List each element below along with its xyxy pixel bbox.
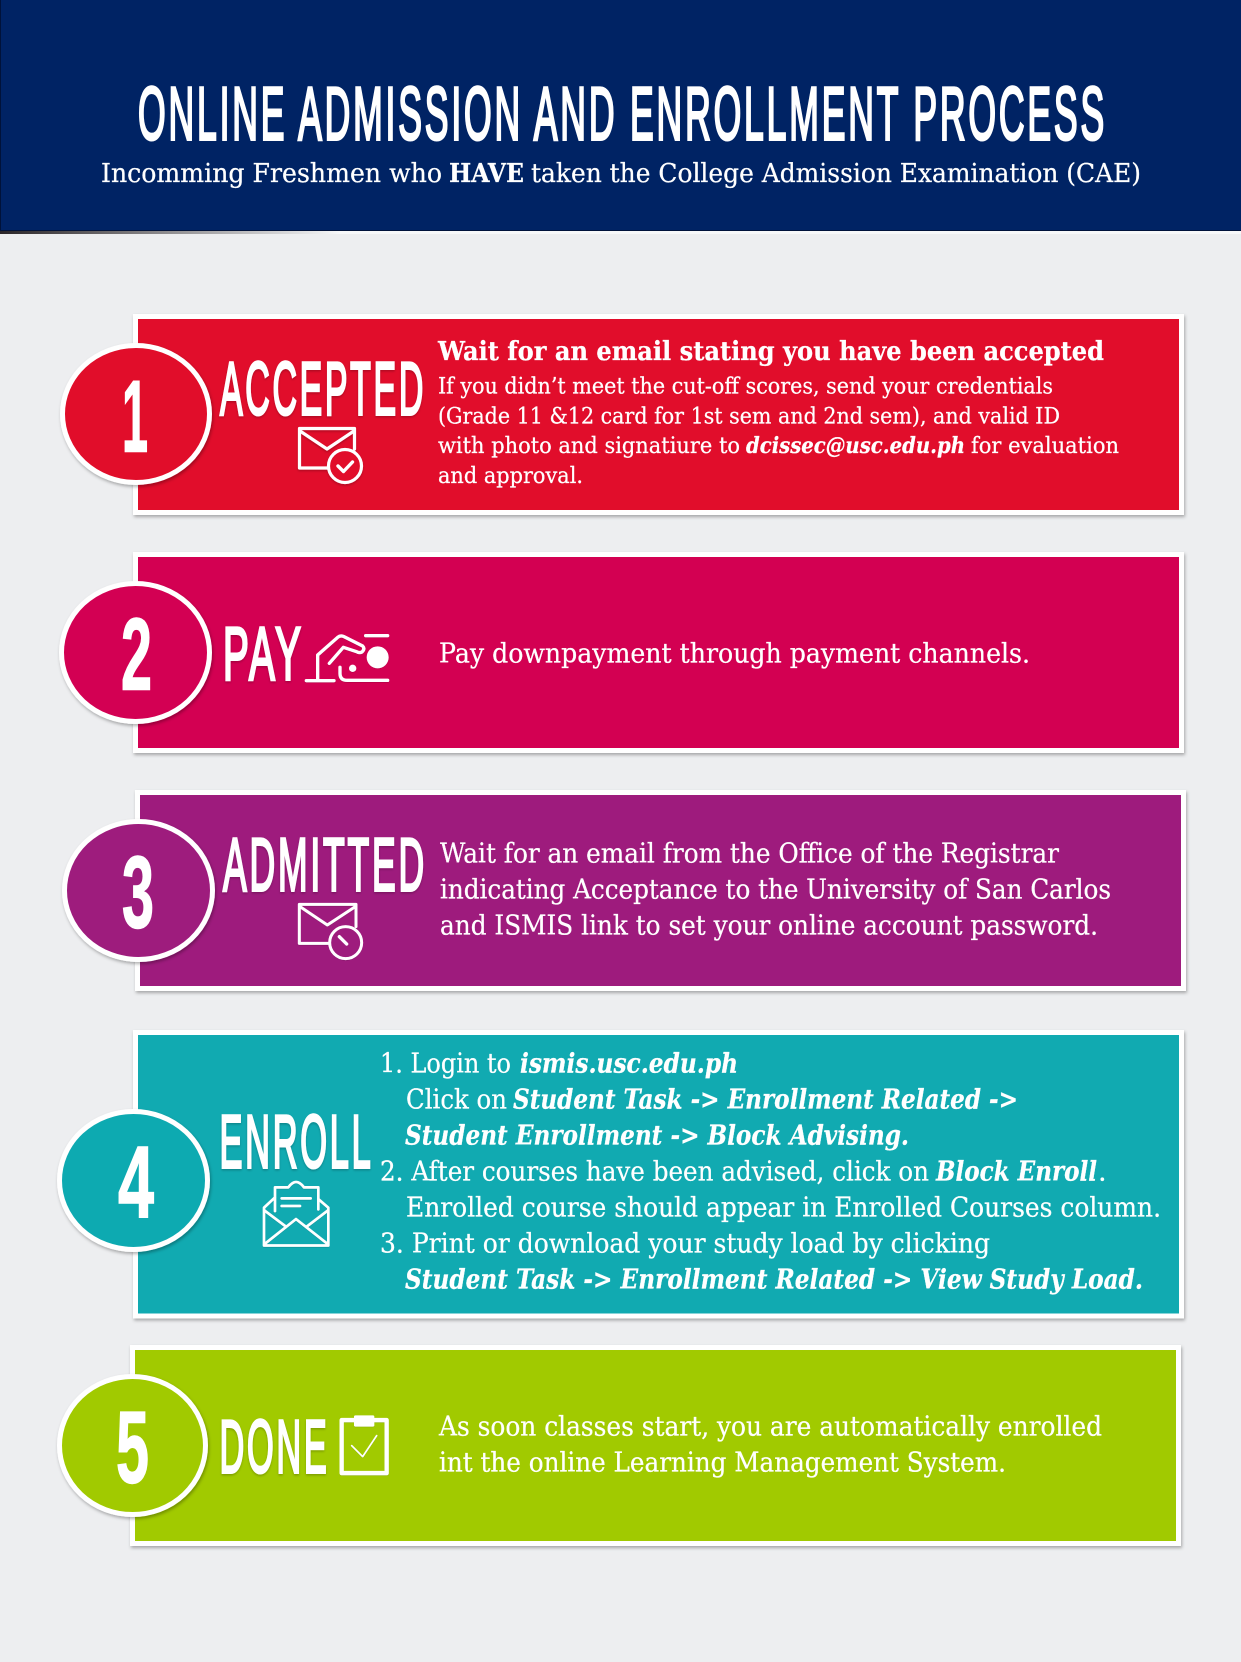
icon: clipboard with check	[342, 1415, 387, 1473]
step 3 number circle: 3	[122, 836, 154, 950]
step 2 number circle	[62, 584, 210, 722]
step 4 instructions	[380, 1048, 1161, 1296]
step 4 instructions: ismis.usc.edu.ph	[520, 1048, 738, 1080]
subtitle: Incomming Freshmen who	[101, 159, 442, 189]
step 3 text: indicating Acceptance to the University of San Carlos	[440, 874, 1111, 906]
step 4 instructions: Click on	[406, 1084, 507, 1116]
step 4 instructions: 2. After courses have been advised, click on	[380, 1156, 929, 1188]
step 5 number circle: 5	[116, 1390, 149, 1504]
step 3 text: and ISMIS link to set your online account password.	[440, 910, 1098, 942]
panel: step 4 enroll: ENROLL	[220, 1100, 374, 1184]
step 4 number circle	[60, 1112, 208, 1250]
step 3 text: Wait for an email from the Office of the Registrar	[440, 838, 1059, 870]
step 5 text: As soon classes start, you are automatically enrolled	[438, 1412, 1102, 1442]
step 3 text	[440, 838, 1111, 942]
step 2 number circle: 2	[121, 598, 152, 712]
step 1 body text: for evaluation	[971, 433, 1119, 459]
step 4 instructions: Enrolled course should appear in Enrolled Courses column.	[406, 1192, 1161, 1224]
step 5 text: int the online Learning Management System.	[439, 1448, 1006, 1478]
step 1 body text: with photo and signatiure to	[438, 433, 740, 459]
panel: step 1 accepted: ACCEPTED	[220, 348, 426, 432]
step 4 instructions: 1. Login to	[380, 1048, 511, 1080]
step 4 instructions: Student Enrollment -> Block Advising.	[405, 1120, 909, 1152]
step 1 body text: dcissec@usc.edu.ph	[746, 433, 965, 459]
step 1 number circle: 1	[122, 360, 148, 474]
step 1 heading: Wait for an email stating you have been accepted	[437, 336, 1104, 367]
icon: envelope with check	[300, 428, 362, 482]
header banner	[0, 0, 1241, 234]
step 4 number circle: 4	[118, 1126, 154, 1240]
subtitle: taken the College Admission Examination (CAE)	[531, 159, 1141, 189]
step 2 label: PAY	[223, 612, 304, 696]
step 1 body text: (Grade 11 &12 card for 1st sem and 2nd sem), and valid ID	[438, 404, 1060, 430]
step 5 text	[438, 1412, 1102, 1478]
step 4 instructions: Student Task -> Enrollment Related ->	[513, 1084, 1018, 1116]
step 1 body text: and approval.	[438, 463, 583, 489]
subtitle: HAVE	[449, 159, 524, 189]
icon: envelope with timer	[299, 904, 362, 959]
panel: step 4 enroll	[60, 1030, 1184, 1318]
step 3 number circle	[64, 822, 212, 960]
panel: step 1 accepted	[62, 314, 1184, 515]
step 2 text: Pay downpayment through payment channels.	[439, 638, 1030, 670]
icon: open envelope	[264, 1182, 328, 1246]
step 4 instructions: Student Task -> Enrollment Related -> View Study Load.	[405, 1264, 1143, 1296]
step 4 instructions: 3. Print or download your study load by clicking	[380, 1228, 990, 1260]
step 4 instructions: Block Enroll	[935, 1156, 1097, 1188]
step 1 body text: If you didn’t meet the cut-off scores, send your credentials	[438, 374, 1053, 400]
panel: step 3 admitted	[64, 790, 1186, 991]
panel: step 5 done: DONE	[220, 1406, 330, 1490]
icon: swimmer	[306, 636, 389, 681]
panel: step 3 admitted: ADMITTED	[223, 824, 427, 908]
step 1 number circle	[62, 346, 210, 482]
panel: step 2 pay	[62, 552, 1184, 753]
step 5 number circle	[60, 1376, 206, 1514]
step 4 instructions: .	[1098, 1156, 1107, 1188]
step 1 body text	[438, 374, 1119, 489]
panel: step 5 done	[60, 1345, 1181, 1546]
